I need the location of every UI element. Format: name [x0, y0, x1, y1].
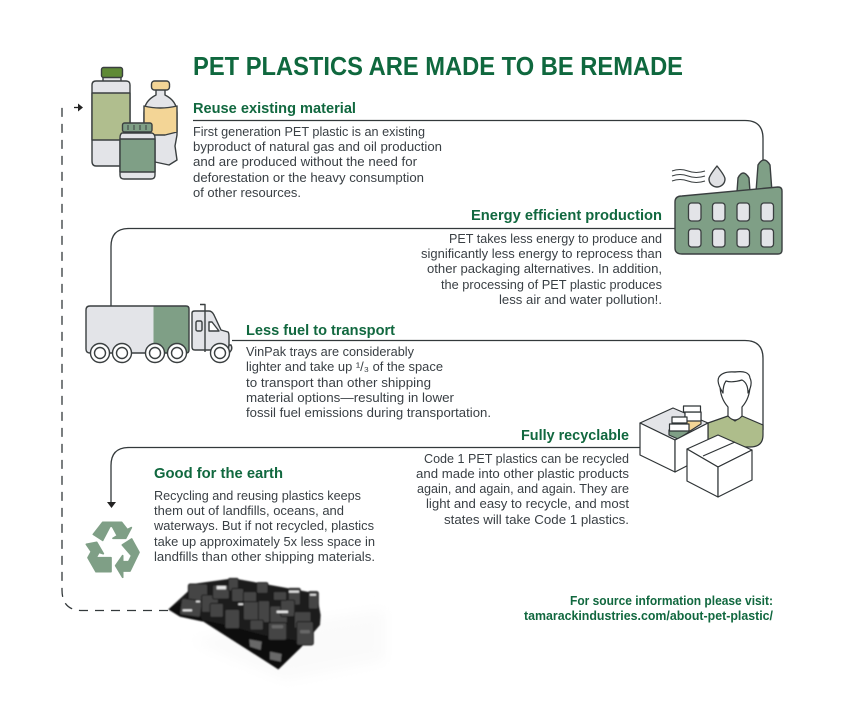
panel: reuse existing material: [193, 101, 442, 200]
source information: [524, 594, 773, 623]
heading: Less fuel to transport: [246, 323, 395, 339]
body text: take up approximately 5x less space in: [154, 534, 375, 549]
head: [720, 372, 750, 420]
body text: the processing of PET plastic produces: [441, 277, 662, 292]
panel: good for the earth: [153, 466, 375, 564]
building: [675, 187, 782, 254]
body text: significantly less energy to reprocess than: [421, 246, 662, 261]
flow connector: truck to person: [232, 340, 763, 430]
body text: to transport than other shipping: [246, 375, 431, 390]
icon: person with recycling boxes: [640, 372, 763, 497]
open box interior: [640, 408, 708, 440]
body text: [416, 451, 629, 527]
jar: [120, 123, 155, 179]
icon: truck: [86, 304, 232, 362]
source information: tamarackindustries.com/about-pet-plastic/: [524, 609, 773, 623]
body text: of other resources.: [193, 185, 301, 200]
icon: recycling symbol: [86, 522, 139, 577]
water bottle: [135, 81, 177, 165]
body text: and are produced without the need for: [193, 154, 418, 169]
body text: [153, 488, 375, 564]
icon: factory: [672, 160, 782, 254]
panel: fully recyclable: [416, 428, 629, 527]
hair: [718, 372, 751, 393]
body text: other packaging alternatives. In addition,: [427, 261, 662, 276]
dashed return loop arrow: [62, 104, 168, 610]
open box front: [640, 423, 675, 472]
photo: black plastic tray: [168, 578, 385, 680]
body text: landfills than other shipping materials.: [154, 549, 375, 564]
body text: [193, 124, 442, 200]
heading: Reuse existing material: [193, 101, 356, 117]
heading: Fully recyclable: [521, 428, 629, 444]
big bottle: [92, 68, 130, 166]
body text: VinPak trays are considerably: [246, 344, 414, 359]
panel: less fuel to transport: [246, 323, 491, 420]
panel: energy efficient production: [421, 208, 662, 307]
shirt: [708, 416, 763, 447]
closed box: [687, 435, 752, 467]
wheels: [90, 344, 230, 362]
body text: [246, 344, 491, 420]
chimneys: [737, 173, 750, 192]
title: PET PLASTICS ARE MADE TO BE REMADE: [193, 53, 683, 81]
body text: less air and water pollution!.: [499, 292, 662, 307]
body text: Code 1 PET plastics can be recycled: [424, 451, 629, 466]
body text: and made into other plastic products: [416, 466, 629, 481]
body text: PET takes less energy to produce and: [449, 231, 662, 246]
body text: again, and again, and again. They are: [417, 481, 629, 496]
flow connector: factory to truck: [111, 228, 676, 306]
body text: [421, 231, 662, 307]
heading: Good for the earth: [154, 466, 283, 482]
flow connector: recycling to earth: [111, 448, 640, 502]
body text: fossil fuel emissions during transportation.: [246, 405, 491, 420]
body text: byproduct of natural gas and oil production: [193, 139, 442, 154]
cab: [192, 311, 229, 350]
body text: Recycling and reusing plastics keeps: [154, 488, 361, 503]
body text: material options—resulting in lower: [246, 390, 455, 405]
heading: Energy efficient production: [471, 208, 662, 224]
icon: bottles: [92, 68, 177, 179]
trailer: [86, 306, 189, 353]
body text: waterways. But if not recycled, plastics: [153, 518, 374, 533]
arrowhead: into recycling icon: [107, 502, 116, 508]
body text: states will take Code 1 plastics.: [444, 512, 629, 527]
body text: lighter and take up ¹/₃ of the space: [246, 359, 443, 374]
source information: For source information please visit:: [570, 594, 773, 608]
body text: deforestation or the heavy consumption: [193, 170, 424, 185]
windows: [688, 203, 774, 247]
body text: light and easy to recycle, and most: [426, 496, 629, 511]
jars in box: [669, 406, 701, 439]
water drop: [709, 166, 725, 187]
body text: them out of landfills, oceans, and: [154, 503, 344, 518]
flow connector: reuse to factory: [193, 120, 763, 160]
body text: First generation PET plastic is an existing: [193, 124, 425, 139]
air waves: [672, 170, 705, 182]
